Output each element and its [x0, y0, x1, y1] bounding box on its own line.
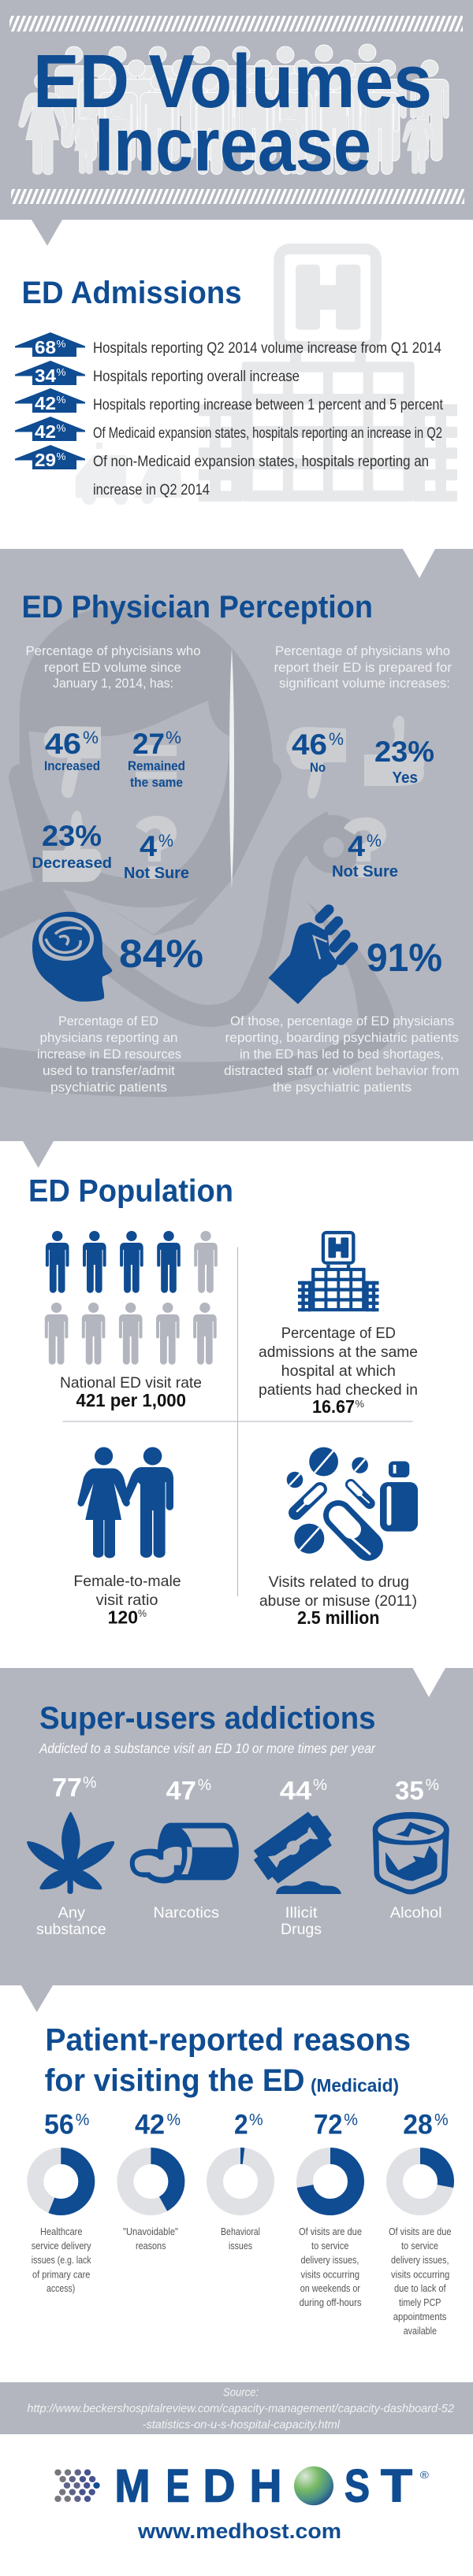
icon: head with swirl	[32, 912, 112, 1002]
donut 42%: "Unavoidable"	[123, 2226, 178, 2237]
left question text: report ED volume since	[44, 661, 181, 675]
donut 56%: %	[76, 2111, 89, 2129]
wordmark: ®	[420, 2469, 429, 2481]
stat: illicit drugs: Drugs	[281, 1921, 322, 1938]
donut 28%: available	[404, 2326, 437, 2337]
stat: 23% yes	[374, 736, 434, 787]
stat row 42% Medicaid	[15, 417, 442, 442]
stat row 34%	[15, 361, 300, 386]
caption: 91%	[224, 1014, 459, 1095]
donut 56%: of primary care	[32, 2269, 90, 2280]
subtitle: Addicted to a substance visit an ED 10 or more times per year	[39, 1740, 376, 1756]
stat: 4% not sure right: 4	[348, 830, 365, 862]
stat: 23% yes: 23%	[374, 736, 434, 768]
stat row 29%: increase in Q2 2014	[93, 481, 210, 499]
stat: illicit drugs	[254, 1776, 341, 1938]
panel: ED admissions	[15, 243, 457, 505]
stat: any substance: 77	[52, 1773, 82, 1802]
text: same hospital admissions: %	[355, 1398, 364, 1410]
caption: 84%: used to transfer/admit	[43, 1064, 175, 1078]
donut 56%	[32, 2110, 91, 2294]
icon: dot cluster	[54, 2470, 100, 2502]
stat row 29%	[15, 445, 429, 499]
donut 28%: Of visits are due	[389, 2226, 452, 2237]
panel: ED physician perception	[0, 549, 473, 1168]
stat row 29%: Of non-Medicaid expansion states, hospitals reporting an	[93, 453, 429, 470]
header panel	[0, 0, 473, 246]
caption: 91%: Of those, percentage of ED physicians	[230, 1014, 454, 1029]
stat: any substance	[27, 1773, 114, 1938]
donut 2%: issues	[229, 2241, 252, 2252]
caption: 84%	[37, 1014, 181, 1095]
text: female-to-male ratio: visit ratio	[96, 1592, 158, 1609]
panel: patient-reported reasons	[32, 2022, 452, 2337]
donut 72%	[299, 2110, 362, 2308]
icon: ten people	[45, 1231, 218, 1365]
source bar: http://www.beckershospitalreview.com/capacity-management/capacity-dashboard-52	[27, 2402, 455, 2415]
wordmark: D	[203, 2461, 235, 2512]
stat: 23% decreased: 23%	[42, 820, 102, 852]
donut 28%: due to lack of	[394, 2283, 446, 2294]
donut 56%: 56	[44, 2110, 74, 2140]
text: female-to-male ratio	[73, 1573, 181, 1627]
icons: light thumbs and question marks	[43, 716, 424, 882]
stat row 42% Medicaid: 42	[35, 421, 56, 442]
wordmark: H	[249, 2461, 282, 2512]
stat: 4% not sure left	[124, 830, 189, 882]
stat: 46% no	[292, 728, 344, 775]
stat: 46% increased: %	[83, 728, 99, 747]
heading: Super-users addictions	[39, 1701, 375, 1736]
stat row 34%: 34	[35, 365, 56, 386]
stat: 46% no: No	[310, 760, 326, 775]
source bar: Source:	[223, 2386, 259, 2400]
stat: 4% not sure right: %	[367, 831, 382, 851]
icon: clenched fist	[269, 910, 353, 1004]
caption: 84%: increase in ED resources	[37, 1047, 181, 1062]
donut 72%: to service	[311, 2241, 348, 2252]
donut 28%: visits occurring	[391, 2269, 449, 2280]
icon: couple	[77, 1447, 173, 1558]
donut 28%: 28	[403, 2110, 433, 2140]
stat: 27% remained the same: Remained	[128, 758, 185, 773]
stat: 46% no: 46	[292, 728, 327, 761]
stat row 29%: 29	[35, 450, 56, 470]
stat: any substance: %	[83, 1774, 97, 1792]
bottom stripe band	[11, 189, 464, 204]
crowd of people illustration	[19, 44, 449, 175]
stat: 46% no: %	[329, 729, 344, 749]
donut 2%: Behavioral	[221, 2226, 260, 2237]
caption: 84%: physicians reporting an	[39, 1031, 178, 1045]
stat: 46% increased: Increased	[44, 758, 100, 773]
stat: any substance: substance	[36, 1921, 106, 1938]
stat: 23% decreased: Decreased	[32, 855, 112, 872]
caption: 91%: distracted staff or violent behavior from	[224, 1064, 459, 1078]
text: national visit rate: 421 per 1,000	[76, 1390, 186, 1410]
stat row 42%: 42	[35, 393, 56, 413]
donut 42%: reasons	[136, 2241, 166, 2252]
donut 72%: during off-hours	[300, 2297, 361, 2308]
stat: narcotics: 47	[166, 1776, 196, 1805]
stat row 68%: 68	[35, 337, 56, 358]
stat: narcotics: Narcotics	[153, 1904, 219, 1922]
panel: super-users addictions	[0, 1668, 473, 2012]
heading: ED Admissions	[22, 276, 241, 310]
stat row 34%: Hospitals reporting overall increase	[93, 368, 300, 385]
text: drug related visits	[259, 1573, 417, 1628]
stat: 27% remained the same	[128, 728, 185, 790]
donut 42%: %	[167, 2111, 181, 2129]
donut 2%: %	[249, 2111, 263, 2129]
stat row 29%: %	[57, 450, 66, 462]
right question text: report their ED is prepared for	[274, 661, 453, 675]
right question text	[274, 644, 453, 691]
quadrant dividers	[63, 1247, 413, 1596]
icon: glass with ice	[373, 1812, 449, 1894]
stat: 84%: 84%	[119, 932, 203, 976]
wordmark: M	[115, 2461, 150, 2512]
text: drug related visits: 2.5 million	[297, 1607, 379, 1628]
text: same hospital admissions: 16.67	[312, 1396, 355, 1417]
watermark: ambulance	[76, 443, 183, 505]
stat: illicit drugs: Illicit	[285, 1904, 318, 1922]
donut 56%: service delivery	[32, 2241, 91, 2252]
stat: any substance: Any	[58, 1904, 85, 1922]
divider	[229, 648, 234, 888]
icon: spilled pill bottle	[130, 1823, 239, 1883]
donut 56%: Healthcare	[40, 2226, 83, 2237]
stat: 46% increased	[44, 728, 100, 773]
left question text	[25, 644, 200, 691]
text: national visit rate	[60, 1374, 202, 1410]
donut 56%: issues (e.g. lack	[32, 2255, 91, 2266]
source bar	[0, 2382, 473, 2434]
wordmark: E	[166, 2461, 189, 2512]
icon: razor blade and powder	[254, 1812, 341, 1894]
donut 28%: delivery issues,	[391, 2255, 449, 2266]
text: female-to-male ratio: 120	[108, 1607, 138, 1627]
right question text: Percentage of physicians who	[275, 644, 450, 658]
heading: Patient-reported reasons	[45, 2022, 411, 2057]
right question text: significant volume increases:	[279, 676, 450, 691]
text: same hospital admissions: hospital at which	[281, 1362, 396, 1380]
stat: alcohol: %	[426, 1777, 439, 1794]
stat: 4% not sure right	[332, 830, 398, 880]
stat row 42%: %	[57, 394, 66, 406]
website: www.medhost.com	[137, 2519, 341, 2543]
top stripe band	[9, 16, 463, 32]
donut 72%: on weekends or	[300, 2283, 360, 2294]
donut 72%: %	[344, 2111, 358, 2129]
caption: 91%: reporting, boarding psychiatric patients	[225, 1031, 459, 1045]
caption: 84%: Percentage of ED	[58, 1014, 158, 1029]
stat: 4% not sure right: Not Sure	[332, 863, 398, 880]
donut 72%: Of visits are due	[299, 2226, 362, 2237]
text: female-to-male ratio: %	[138, 1607, 147, 1619]
donut 72%: 72	[314, 2110, 342, 2140]
donut 28%: appointments	[393, 2311, 446, 2322]
stat: alcohol: Alcohol	[390, 1904, 442, 1922]
stat row 42%	[15, 388, 443, 413]
donut 72%: visits occurring	[301, 2269, 359, 2280]
stat: 4% not sure left: %	[158, 831, 173, 851]
stat: 27% remained the same: the same	[130, 775, 183, 790]
icon: cannabis leaf	[27, 1812, 114, 1894]
stat: illicit drugs: %	[313, 1777, 327, 1794]
heading	[45, 2022, 411, 2098]
heading: for visiting the ED	[45, 2063, 304, 2098]
donut 2%: 2	[234, 2110, 248, 2140]
stat: alcohol	[373, 1776, 449, 1922]
title: ED Volumes	[33, 39, 432, 124]
text: national visit rate: National ED visit rate	[60, 1374, 202, 1392]
donut 2%	[214, 2110, 266, 2252]
caption: 84%: psychiatric patients	[50, 1080, 167, 1095]
stat: 91%: 91%	[367, 936, 442, 980]
text: same hospital admissions: patients had checked in	[259, 1381, 418, 1399]
stat: 27% remained the same: %	[166, 728, 181, 747]
stat row 68%: %	[57, 338, 66, 350]
icon: sphere	[294, 2467, 333, 2505]
stat: 23% decreased	[32, 820, 112, 872]
donut 28%: to service	[401, 2241, 438, 2252]
caption: 91%: the psychiatric patients	[273, 1080, 412, 1095]
stat: narcotics	[130, 1776, 239, 1922]
heading: ED Population	[28, 1173, 233, 1208]
stat: illicit drugs: 44	[280, 1776, 312, 1805]
wordmark: T	[381, 2461, 412, 2512]
donut 28%: timely PCP	[399, 2297, 441, 2308]
title	[33, 39, 432, 187]
donut 42%: 42	[135, 2110, 165, 2140]
donut 28%	[389, 2110, 452, 2337]
icon: hospital building	[298, 1231, 378, 1311]
stat: alcohol: 35	[395, 1776, 424, 1805]
text: drug related visits: Visits related to drug	[269, 1573, 409, 1591]
stat row 68%	[15, 332, 441, 358]
donut 42%	[123, 2110, 181, 2252]
stat: 27% remained the same: 27	[132, 728, 165, 760]
stat: narcotics: %	[198, 1777, 211, 1794]
watermark: hospital	[199, 243, 457, 502]
stat: 23% yes: Yes	[393, 769, 418, 787]
logo: MEDHOST	[54, 2461, 429, 2543]
watermark: doctor with stethoscope	[0, 604, 396, 1097]
caption: 91%: in the ED has led to bed shortages,	[240, 1047, 444, 1062]
text: same hospital admissions: Percentage of ED	[281, 1325, 396, 1342]
stat row 42% Medicaid: %	[57, 422, 66, 434]
source bar: -statistics-on-u-s-hospital-capacity.html	[143, 2418, 341, 2432]
wordmark: S	[345, 2461, 370, 2512]
stat: 46% increased: 46	[45, 728, 81, 760]
wordmark	[115, 2461, 429, 2512]
text: same hospital admissions	[259, 1325, 418, 1417]
donut 56%: access)	[47, 2283, 75, 2294]
text: same hospital admissions: admissions at the same	[259, 1344, 418, 1361]
heading: ED Physician Perception	[22, 590, 373, 625]
stat: 4% not sure left: 4	[140, 830, 157, 862]
heading: (Medicaid)	[311, 2075, 399, 2096]
left question text: January 1, 2014, has:	[53, 676, 173, 691]
panel: ED population	[28, 1173, 418, 1628]
text: female-to-male ratio: Female-to-male	[73, 1573, 181, 1590]
left question text: Percentage of phycisians who	[25, 644, 200, 658]
icon: pills and bottle	[287, 1447, 418, 1554]
donut 28%: %	[434, 2111, 449, 2129]
stat row 34%: %	[57, 366, 66, 378]
title: Increase	[95, 102, 371, 187]
text: drug related visits: abuse or misuse (2011)	[259, 1592, 417, 1610]
donut 72%: delivery issues,	[301, 2255, 359, 2266]
stat: 4% not sure left: Not Sure	[124, 865, 189, 882]
